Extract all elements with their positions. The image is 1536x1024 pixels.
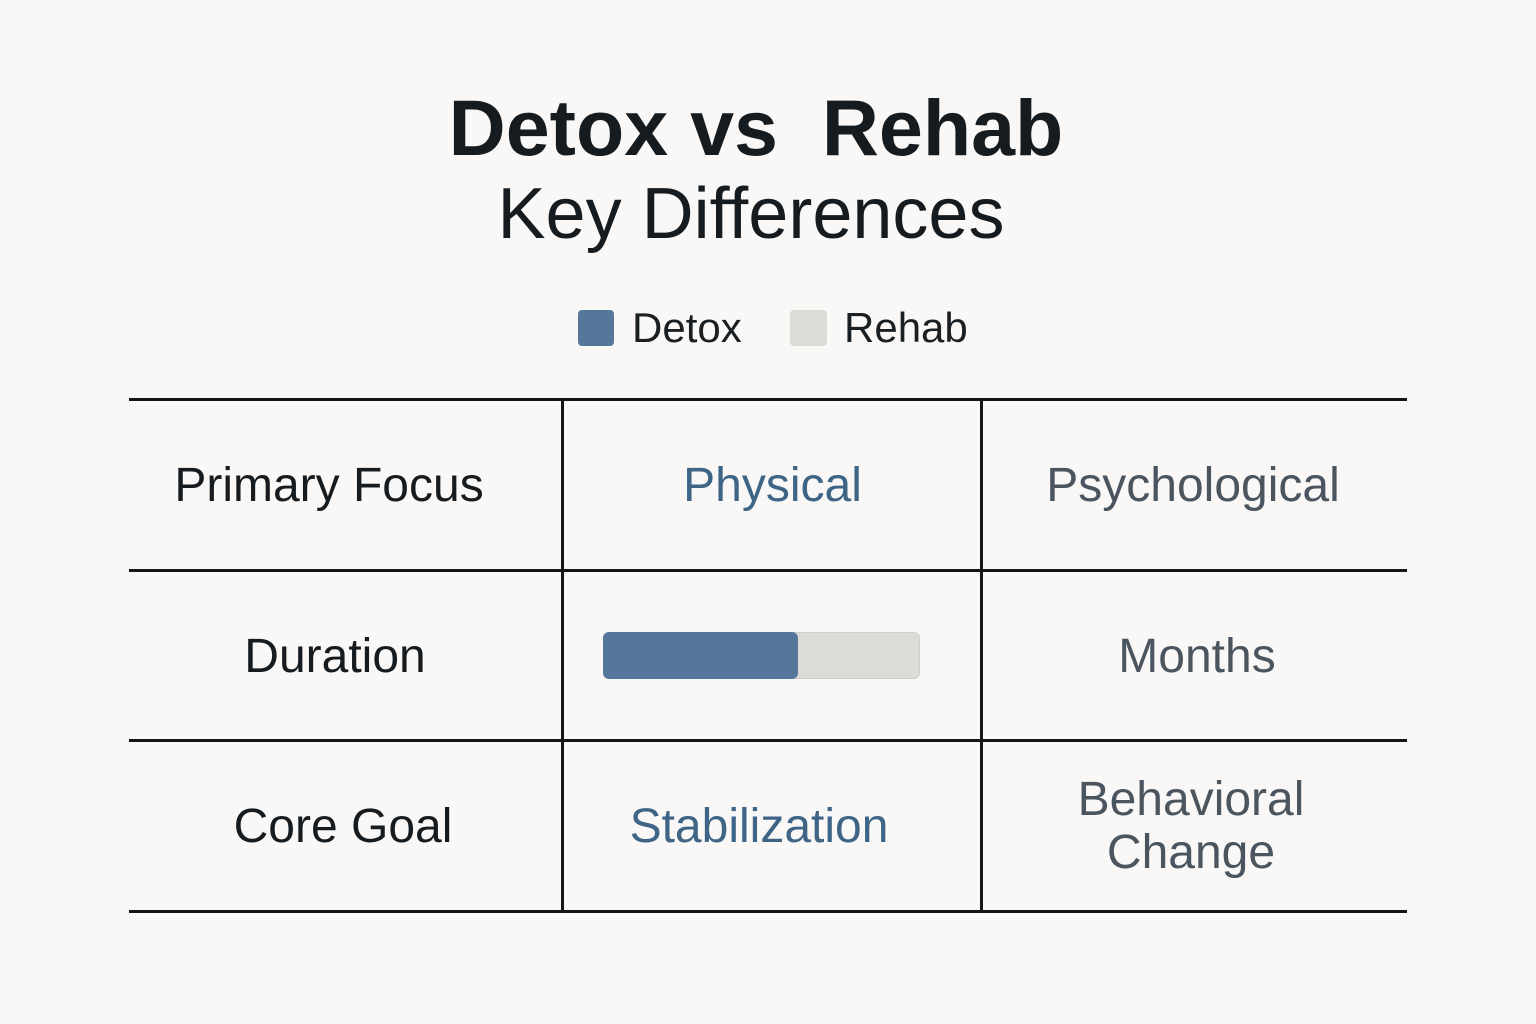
legend: detox [578, 310, 614, 346]
rehab: psychological: Psychological [1046, 458, 1340, 512]
legend label rehab: Rehab [844, 304, 968, 351]
comparison table [129, 398, 1407, 913]
bar: detox portion [603, 632, 798, 679]
subtitle: Key Differences [498, 174, 1004, 254]
legend label detox: Detox [632, 304, 742, 351]
duration bar [603, 632, 920, 679]
detox: physical: Physical [683, 458, 862, 512]
rehab: behavioral change: Change [1107, 826, 1275, 879]
rehab: months: Months [1118, 630, 1276, 682]
rehab: behavioral change: Behavioral [1078, 773, 1304, 826]
legend: rehab [790, 310, 827, 346]
row label: duration: Duration [244, 630, 426, 682]
rehab: behavioral change [1078, 773, 1304, 879]
detox: stabilization: Stabilization [630, 800, 888, 852]
row label: core goal: Core Goal [234, 800, 452, 852]
legend [578, 304, 968, 351]
row label: primary focus: Primary Focus [174, 458, 484, 512]
title: Detox vs Rehab [449, 83, 1063, 172]
